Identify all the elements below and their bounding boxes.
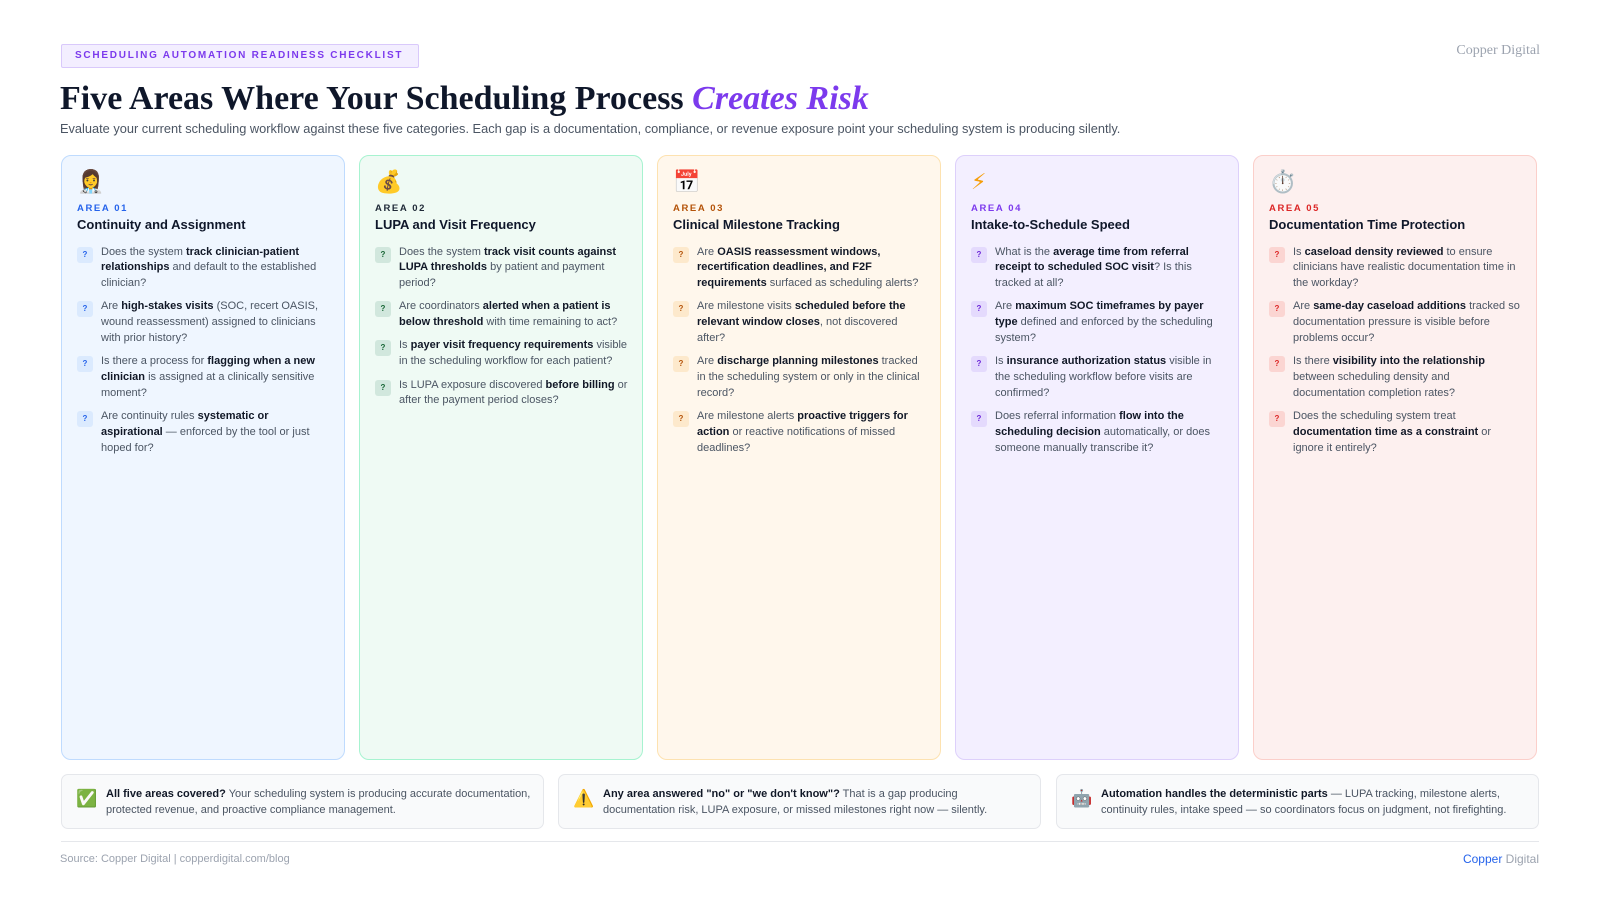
panel: area 01: ? [83,414,87,423]
panel: area 03: Are OASIS reassessment windows, recertification deadlines, and F2F requirements surfaced as scheduling alerts? [697,246,918,289]
footer brand: Copper Digital [1463,852,1539,866]
panel: area 03: ? [679,414,683,423]
panel: area 04: Intake-to-Schedule Speed [971,217,1130,232]
callout: all covered [61,774,544,829]
panel: area 05: ? [1275,359,1279,368]
panel: area 05: Does the scheduling system treat documentation time as a constraint or ignore it entirely? [1293,410,1491,454]
brand top right: Copper Digital [1456,43,1540,58]
panel: area 02: ? [381,250,385,258]
panel: area 03: ? [679,304,683,313]
panel: area 02: ? [381,383,385,392]
callout: gap warning [558,774,1041,829]
panel: area 03: ? [679,250,683,258]
panel: area 05: Are same-day caseload additions tracked so documentation pressure is visible before problems occur? [1293,300,1520,344]
panel: area 03: 📅 [673,170,700,195]
callout: all covered: All five areas covered? Your scheduling system is producing accurate documentation, protected revenue, and proactive compliance management. [106,788,530,816]
panel: area 04: Are maximum SOC timeframes by payer type defined and enforced by the scheduling system? [995,300,1213,344]
panel: area 05: Documentation Time Protection [1269,217,1465,232]
title: Five Areas Where Your Scheduling Process Creates Risk [60,80,869,117]
tag [61,44,419,68]
callout: automation [1056,774,1539,829]
panel: area 03: ? [679,359,683,368]
panel: area 02: ? [381,343,385,352]
panel: area 01: ? [83,304,87,313]
panel: area 03: AREA 03 [673,203,724,214]
panel: area 05: Is there visibility into the relationship between scheduling density and documentation completion rates? [1293,355,1485,399]
panel: area 02: AREA 02 [375,203,426,214]
panel: area 05: ? [1275,304,1279,313]
panel: area 02: Is LUPA exposure discovered before billing or after the payment period closes? [399,379,627,406]
panel: area 05: ? [1275,414,1279,423]
panel: area 04 [955,155,1239,760]
panel: area 01: Are high-stakes visits (SOC, recert OASIS, wound reassessment) assigned to clinicians with prior history? [101,300,318,344]
panel: area 01: AREA 01 [77,203,128,214]
callout: automation: 🤖 [1071,789,1092,809]
panel: area 03: Are discharge planning milestones tracked in the scheduling system or only in the clinical record? [697,355,920,399]
panel: area 02: LUPA and Visit Frequency [375,217,536,232]
panel: area 04: ? [977,414,981,423]
panel: area 04: What is the average time from referral receipt to scheduled SOC visit? Is this tracked at all? [995,246,1192,289]
panel: area 04: ⚡ [971,170,986,195]
panel: area 01: Continuity and Assignment [77,217,246,232]
panel: area 04: Is insurance authorization status visible in the scheduling workflow before visits are confirmed? [995,355,1211,399]
panel: area 03 [657,155,941,760]
panel: area 04: ? [977,250,981,258]
panel: area 05: AREA 05 [1269,203,1320,214]
panel: area 02: Does the system track visit counts against LUPA thresholds by patient and payment period? [399,246,616,289]
tag: SCHEDULING AUTOMATION READINESS CHECKLIST [75,50,403,61]
panel: area 01: Are continuity rules systematic or aspirational — enforced by the tool or just hoped for? [101,410,310,454]
panel: area 05: ⏱️ [1269,170,1296,195]
panel: area 01: Is there a process for flagging when a new clinician is assigned at a clinically sensitive moment? [101,355,315,399]
panel: area 04: ? [977,304,981,313]
callout: gap warning: ⚠️ [573,789,594,809]
panel: area 02: ? [381,304,385,313]
callout: all covered: ✅ [76,789,97,809]
callout: gap warning: Any area answered "no" or "we don't know"? That is a gap producing documentation risk, LUPA exposure, or missed milestones right now — silently. [603,788,987,816]
panel: area 03: Are milestone visits scheduled before the relevant window closes, not discovered after? [697,300,905,344]
subtitle: Evaluate your current scheduling workflow against these five categories. Each gap is a documentation, compliance, or revenue exposure point your scheduling system is producing silently. [60,121,1120,136]
panel: area 04: Does referral information flow into the scheduling decision automatically, or does someone manually transcribe it? [995,410,1210,454]
panel: area 02: Are coordinators alerted when a patient is below threshold with time remaining to act? [399,300,617,328]
panel: area 02: 💰 [375,170,402,195]
panel: area 01: 👩‍⚕️ [77,170,104,195]
callout: automation: Automation handles the deterministic parts — LUPA tracking, milestone alerts, continuity rules, intake speed — so coordinators focus on judgment, not firefighting. [1101,788,1506,816]
panel: area 03: Clinical Milestone Tracking [673,217,840,232]
source: Source: Copper Digital | copperdigital.com/blog [60,853,290,865]
panel: area 04: ? [977,359,981,368]
panel: area 01 [61,155,345,760]
panel: area 05: Is caseload density reviewed to ensure clinicians have realistic documentation time in the workday? [1293,246,1516,289]
panel: area 01: Does the system track clinician-patient relationships and default to the established clinician? [101,246,316,289]
panel: area 03: Are milestone alerts proactive triggers for action or reactive notifications of missed deadlines? [697,410,908,454]
panel: area 02 [359,155,643,760]
panel: area 05: ? [1275,250,1279,258]
panel: area 01: ? [83,359,87,368]
panel: area 01: ? [83,250,87,258]
panel: area 02: Is payer visit frequency requirements visible in the scheduling workflow for each patient? [399,339,627,367]
panel: area 04: AREA 04 [971,203,1022,214]
panel: area 05 [1253,155,1537,760]
